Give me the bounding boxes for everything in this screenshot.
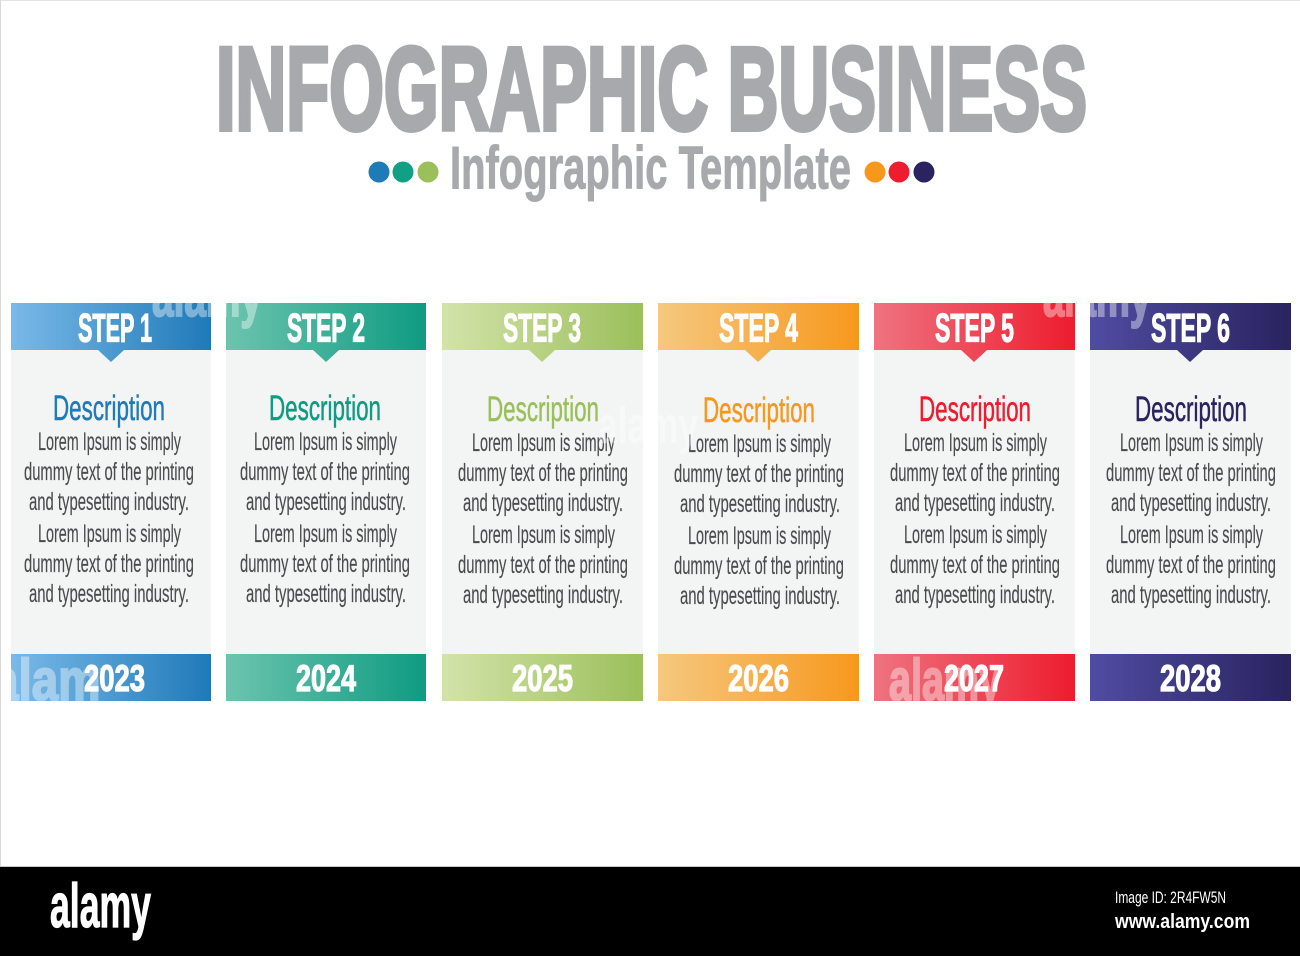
step 4 body text: dummy text of the printing [674,552,844,580]
step 5 footer [874,654,1075,701]
step 4 label: STEP 4 [719,306,798,350]
step 4 year: 2026 [728,658,789,699]
step 3 heading: Description [487,390,599,429]
step 1 body text: Lorem Ipsum is simply [38,520,181,548]
step 6 body text [1106,429,1276,609]
step 2 body text [240,428,410,608]
step 4 body text: dummy text of the printing [674,460,844,488]
alamy logo: alamy [50,872,151,941]
step 4 body text: and typesetting industry. [680,582,840,610]
step 1 body text [24,428,194,608]
step 5 body text: dummy text of the printing [890,551,1060,579]
step 4 body text: and typesetting industry. [680,490,840,518]
step 1 body text: and typesetting industry. [29,488,189,516]
step 4 footer [658,654,859,701]
decorative dots left [368,162,438,182]
watermark fragments: alamy [598,397,698,455]
step 5 body text: dummy text of the printing [890,459,1060,487]
step 3 footer [442,654,643,701]
step 6 header [1090,303,1291,362]
step 1 heading: Description [53,389,165,428]
image id: Image ID: 2R4FW5N [1115,888,1226,907]
step 3 body text: and typesetting industry. [463,489,623,517]
subtitle: Infographic Template [450,134,851,202]
step 1 year: 2023 [84,658,145,699]
panel: step 3 [442,303,643,701]
panel: step 5 [874,303,1075,701]
step 5 body text: Lorem Ipsum is simply [904,429,1047,457]
step 6 footer [1090,654,1291,701]
step 3 body text: and typesetting industry. [463,581,623,609]
step 2 heading: Description [269,389,381,428]
step 2 year: 2024 [296,658,356,699]
step 3 body text [458,429,628,609]
step 1 body text: and typesetting industry. [29,580,189,608]
panel: step 2 [226,303,426,701]
step 3 body text: Lorem Ipsum is simply [472,429,615,457]
panel: step 4 [658,303,859,701]
step 5 body text [890,429,1060,609]
step 2 footer [226,654,426,701]
step 2 body text: dummy text of the printing [240,458,410,486]
step 5 body text: and typesetting industry. [895,581,1055,609]
footer bar [0,866,1300,956]
step 5 year: 2027 [944,658,1004,699]
watermark fragments: alamy [889,648,1001,713]
step 1 body text: dummy text of the printing [24,550,194,578]
step 2 body text: and typesetting industry. [246,580,406,608]
step 2 body text: dummy text of the printing [240,550,410,578]
step 4 body text: Lorem Ipsum is simply [688,430,831,458]
step 2 body text: and typesetting industry. [246,488,406,516]
step 5 header [874,303,1075,362]
decorative dots right [864,162,934,182]
step 4 heading: Description [703,391,815,430]
step 3 body text: dummy text of the printing [458,551,628,579]
panel: step 1 [11,303,211,701]
panel: step 6 [1090,303,1291,701]
watermark fragments: alamy [1043,264,1151,329]
step 1 footer [11,654,211,701]
step 2 header [226,303,426,362]
step 2 label: STEP 2 [287,306,365,350]
watermark fragments: alamy [152,264,262,329]
watermark fragments [11,303,1147,701]
step 1 body text: dummy text of the printing [24,458,194,486]
step 4 body text: Lorem Ipsum is simply [688,522,831,550]
step 5 body text: Lorem Ipsum is simply [904,521,1047,549]
step 3 body text: dummy text of the printing [458,459,628,487]
step 6 year: 2028 [1160,658,1221,699]
step 2 body text: Lorem Ipsum is simply [254,428,397,456]
step 3 label: STEP 3 [503,306,581,350]
step 5 label: STEP 5 [935,306,1014,350]
step 4 body text [674,430,844,610]
step 5 body text: and typesetting industry. [895,489,1055,517]
step 6 label: STEP 6 [1151,306,1230,350]
step 4 header [658,303,859,362]
step 2 body text: Lorem Ipsum is simply [254,520,397,548]
step 3 body text: Lorem Ipsum is simply [472,521,615,549]
step 1 header [11,303,211,362]
website: www.alamy.com [1114,911,1250,933]
step 5 heading: Description [919,390,1031,429]
step 3 year: 2025 [512,658,573,699]
step 1 label: STEP 1 [78,306,152,350]
step 1 body text: Lorem Ipsum is simply [38,428,181,456]
step 3 header [442,303,643,362]
